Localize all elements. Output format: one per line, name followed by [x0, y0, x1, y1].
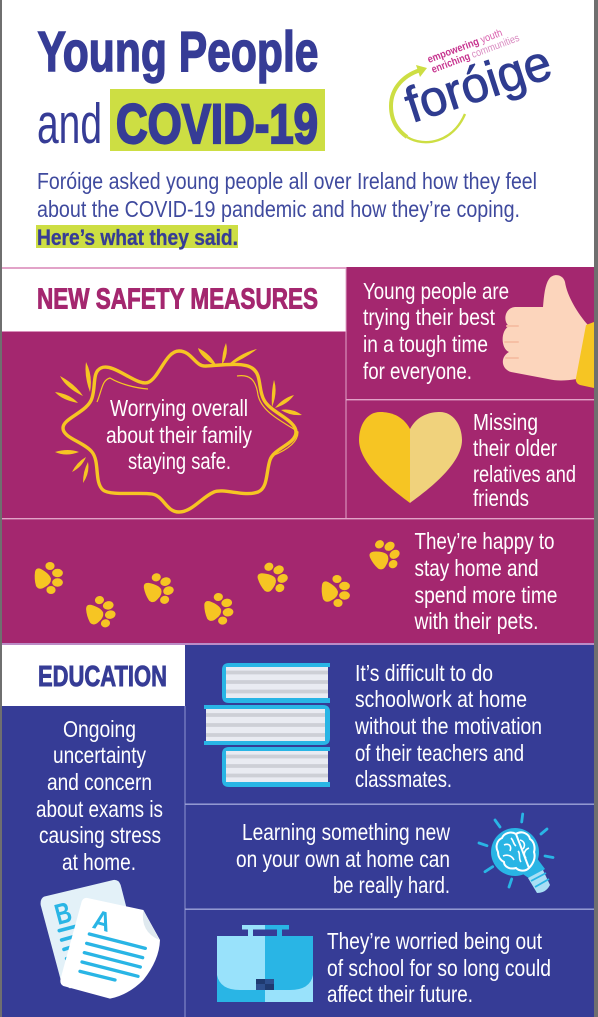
text: exams: uncertainty: [53, 742, 146, 768]
panel: new safety measures: [2, 267, 594, 644]
icon: briefcase: [217, 925, 313, 1002]
text: pets: stay home and: [414, 555, 538, 581]
text: missing relatives: their older: [473, 435, 557, 461]
icon: paw prints: [35, 534, 405, 631]
logo: Foróige: empowering youth: [426, 27, 504, 66]
text: schoolwork: schoolwork at home: [355, 686, 527, 712]
text: pets: [414, 528, 558, 634]
title: and: [37, 92, 102, 156]
icon: exam papers: B: [51, 896, 75, 932]
panel: education: [2, 643, 594, 1017]
heading: new safety measures: NEW SAFETY MEASURES: [37, 284, 318, 316]
text: pets: They’re happy to: [414, 528, 554, 554]
icon: heart: [359, 412, 462, 503]
text: schoolwork: classmates.: [355, 766, 452, 792]
logo: Foróige: enriching communities: [430, 32, 521, 76]
title: COVID-19: [116, 92, 318, 155]
text: trying their best: Young people are: [363, 278, 509, 304]
text: worried about future: affect their future.: [327, 981, 473, 1007]
icon: brain light bulb: [479, 814, 553, 893]
text: exams: at home.: [62, 849, 136, 875]
text: trying their best: [363, 278, 509, 384]
text: trying their best: for everyone.: [363, 358, 472, 384]
text: worrying overall: [106, 395, 252, 474]
text: trying their best: trying their best: [363, 304, 496, 330]
text: worrying overall: Worrying overall: [110, 395, 248, 421]
text: exams: and concern: [47, 769, 152, 795]
text: exams: Ongoing: [63, 716, 136, 742]
text: worried about future: of school for so long could: [327, 955, 551, 981]
text: missing relatives: friends: [473, 485, 529, 511]
text: learning something new: be really hard.: [333, 872, 450, 898]
text: exams: causing stress: [39, 822, 161, 848]
text: learning something new: [236, 819, 450, 898]
text: learning something new: on your own at home can: [236, 846, 450, 872]
intro text: about the COVID-19 pandemic and how they’re coping.: [37, 196, 520, 222]
intro text: [36, 168, 537, 250]
text: trying their best: in a tough time: [363, 331, 488, 357]
text: missing relatives: Missing: [473, 409, 538, 435]
icon: thumbs up: [503, 275, 594, 388]
title: [37, 20, 325, 156]
text: pets: with their pets.: [414, 608, 538, 634]
text: schoolwork: It’s difficult to do: [355, 660, 493, 686]
text: missing relatives: [473, 409, 576, 511]
text: worried about future: [327, 928, 551, 1007]
logo: Foróige: foróige: [398, 34, 558, 133]
text: learning something new: Learning something new: [242, 819, 450, 845]
text: worrying overall: staying safe.: [128, 448, 231, 474]
text: worrying overall: about their family: [106, 422, 252, 448]
text: schoolwork: without the motivation: [354, 713, 542, 739]
text: exams: [36, 716, 163, 875]
text: schoolwork: [354, 660, 542, 792]
icon: wavy burst: [55, 343, 302, 512]
intro text: Here’s what they said.: [37, 225, 238, 250]
icon: exam papers: [41, 880, 160, 999]
text: pets: spend more time: [414, 582, 558, 608]
icon: exam papers: A: [90, 904, 115, 938]
text: exams: about exams is: [36, 796, 163, 822]
text: schoolwork: of their teachers and: [355, 740, 524, 766]
text: worried about future: They’re worried being out: [327, 928, 542, 954]
title: Young People: [38, 20, 318, 84]
icon: stacked books: [204, 663, 330, 787]
heading: education: EDUCATION: [38, 661, 167, 693]
